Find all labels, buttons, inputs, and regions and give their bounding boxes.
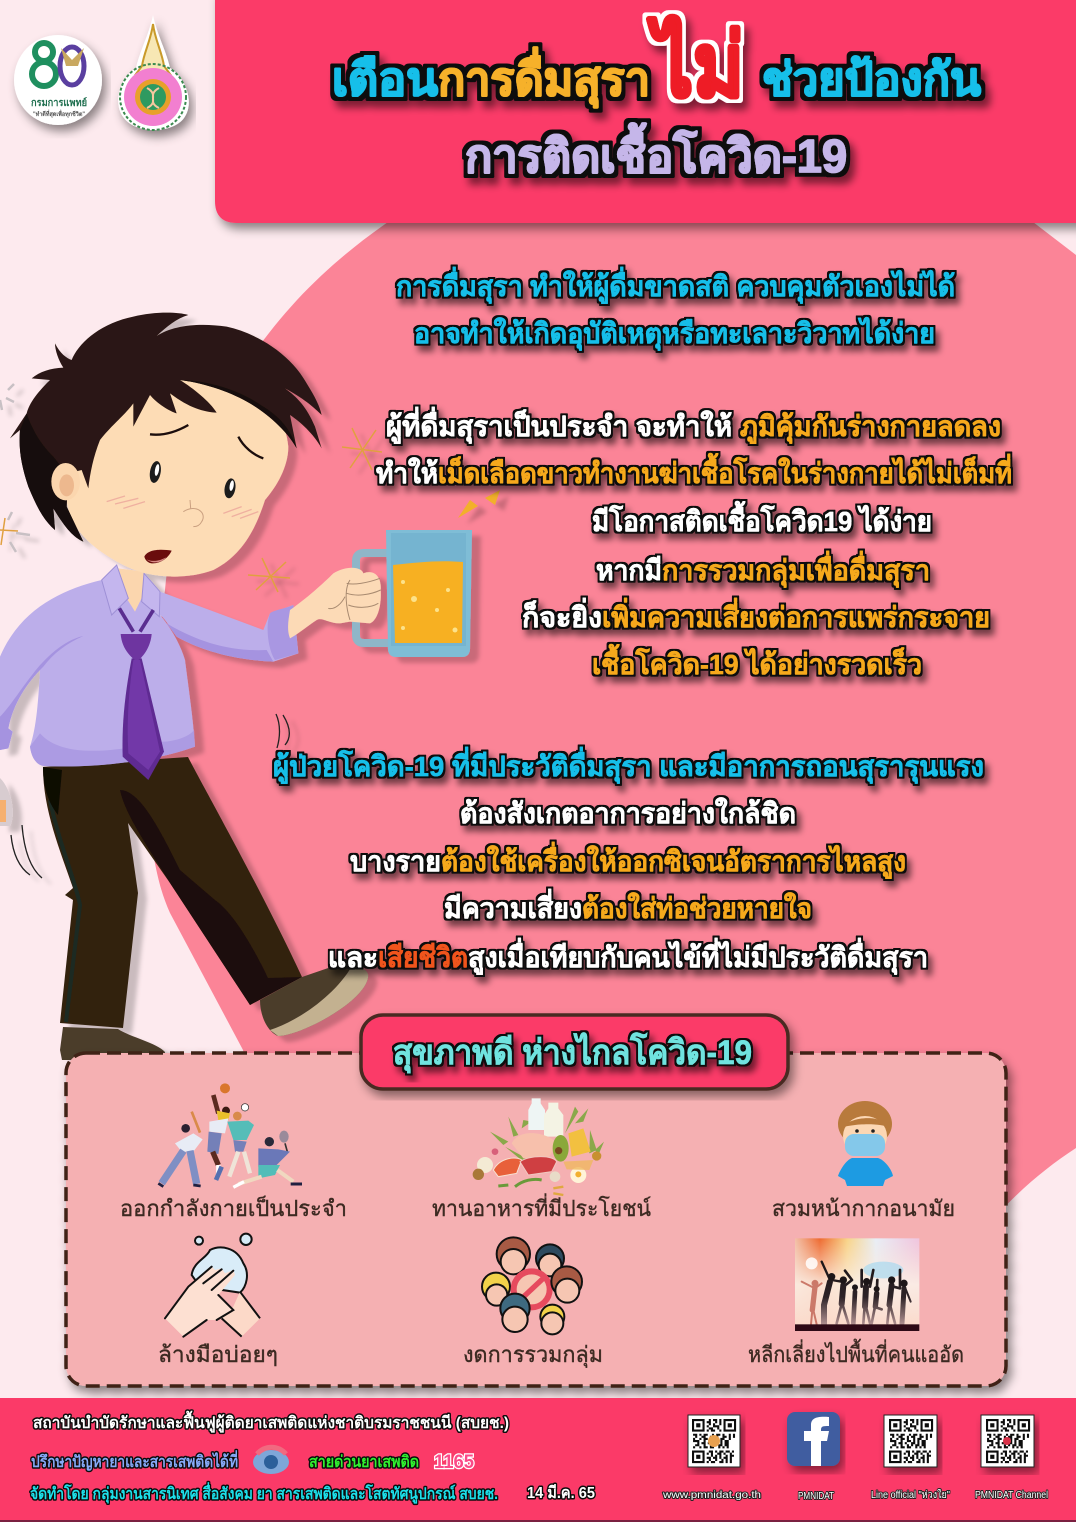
severe line 5: และ <box>328 942 378 973</box>
cuff <box>268 605 298 660</box>
hair <box>10 313 322 542</box>
header banner <box>215 0 1076 223</box>
severe line 3: บางราย <box>350 846 441 877</box>
cheese and mushroom bits <box>477 1157 493 1173</box>
footer: consult line: ปรึกษาปัญหายาและสารเสพติดได้ที่ <box>31 1450 238 1472</box>
title: line 1 part 1: เตือน <box>332 53 439 105</box>
title: line 2: การติดเชื้อโควิด-19 <box>465 122 847 182</box>
footer: hotline label: สายด่วนยาเสพติด <box>309 1453 419 1471</box>
meat <box>520 1157 557 1175</box>
handle <box>356 553 390 643</box>
logo: department of medical services 80 years: "ทำดีที่สุดเพื่อทุกชีวิต" <box>33 109 85 118</box>
salmon <box>493 1158 522 1177</box>
title: line 1 part 2: การดื่มสุรา <box>438 47 650 108</box>
milk bottles <box>528 1098 545 1130</box>
hair <box>838 1101 892 1147</box>
side stripe <box>50 800 80 1022</box>
left arm and torso <box>0 580 195 767</box>
eyes <box>148 460 162 484</box>
text block: immunity <box>376 406 1012 680</box>
beer splash <box>458 490 500 518</box>
ear <box>51 463 80 500</box>
stage <box>795 1324 919 1331</box>
batter <box>158 1112 203 1187</box>
immunity line 1: ผู้ที่ดื่มสุราเป็นประจำ จะทำให้ <box>386 406 732 444</box>
bottom left person <box>500 1294 530 1323</box>
left person <box>482 1273 510 1301</box>
immunity line 2: ทำให้ <box>376 457 438 489</box>
QR code: website <box>688 1415 740 1467</box>
title: emphasised word: ไม่ <box>647 16 744 115</box>
blue glow <box>863 1262 903 1278</box>
QR code: channel <box>981 1415 1034 1467</box>
left shoe <box>60 1027 165 1060</box>
icon: no gathering <box>482 1237 582 1334</box>
front hand edge <box>165 1267 233 1337</box>
immunity line 2 highlight: เม็ดเลือดขาวทำงานฆ่าเชื้อโรคในร่างกายได้ไม่เต็มที่ <box>438 452 1012 489</box>
fringe <box>841 1118 890 1128</box>
intro line 1: การดื่มสุรา ทำให้ผู้ดื่มขาดสติ ควบคุมตัวเองไม่ได้ <box>396 266 955 304</box>
top left person <box>497 1237 530 1271</box>
footer band <box>0 1398 1076 1522</box>
trouser shade <box>120 790 302 1005</box>
severe line 4: มีความเสี่ยง <box>444 888 582 924</box>
grey sparkles <box>0 384 30 552</box>
side shading <box>0 636 83 750</box>
tie blade <box>122 658 164 780</box>
icon: sports people <box>158 1083 302 1187</box>
icon: healthy food <box>473 1098 604 1195</box>
severe line 5 end: สูงเมื่อเทียบกับคนไข้ที่ไม่มีประวัติดื่มสุรา <box>468 937 928 975</box>
icon: child wearing mask <box>838 1101 893 1186</box>
face <box>67 360 288 577</box>
severe line 3 highlight: ต้องใช้เครื่องให้ออกซิเจนอัตราการไหลสูง <box>441 841 906 879</box>
nose <box>183 500 203 527</box>
hip shade <box>43 767 62 815</box>
right person <box>551 1266 582 1297</box>
faded dancer <box>802 1280 822 1324</box>
immunity line 4 highlight: การรวมกลุ่มเพื่อดื่มสุรา <box>662 550 930 588</box>
caption: facebook: PMNIDAT <box>798 1491 834 1502</box>
light backdrop <box>795 1238 919 1331</box>
logo: department of medical services 80 years <box>14 35 102 125</box>
mask <box>845 1134 885 1156</box>
avocado <box>553 1135 569 1162</box>
cheeks and nose <box>107 496 258 518</box>
title <box>332 47 982 182</box>
right shoe <box>260 965 368 1036</box>
icon: facebook <box>787 1412 840 1466</box>
egg orange bits <box>563 1160 593 1170</box>
face <box>843 1116 887 1156</box>
footer: hotline number: 1165 <box>434 1452 474 1473</box>
egg <box>570 1167 586 1183</box>
peas <box>498 1179 542 1187</box>
light spot <box>806 1257 818 1269</box>
title: line 1 part 3: ช่วยป้องกัน <box>762 53 982 105</box>
intro line 2: อาจทำให้เกิดอุบัติเหตุหรือทะเลาะวิวาทได้ง่าย <box>414 317 935 351</box>
tie straps <box>119 608 153 632</box>
immunity line 3: มีโอกาสติดเชื้อโควิด19 ได้ง่าย <box>592 500 932 537</box>
teal player <box>227 1104 254 1177</box>
immunity line 1 highlight: ภูมิคุ้มกันร่างกายลดลง <box>740 411 1001 444</box>
sleeve shade <box>167 623 273 662</box>
icon: telephone <box>253 1447 289 1474</box>
bottom shading <box>30 730 195 767</box>
dancer heads <box>828 1273 908 1292</box>
logo: institute emblem <box>118 15 189 130</box>
label: avoid crowds: หลีกเลี่ยงไปพื้นที่คนแออัด <box>748 1339 964 1367</box>
top right person <box>536 1244 564 1272</box>
immunity line 6: เชื้อโควิด-19 ได้อย่างรวดเร็ว <box>592 643 922 680</box>
jumping player <box>207 1083 230 1180</box>
prohibition sign <box>514 1271 550 1307</box>
bubbles <box>195 1237 203 1245</box>
foam <box>192 1248 247 1293</box>
text block: intro <box>396 266 955 351</box>
trousers <box>43 757 302 1028</box>
back hand <box>222 1292 260 1337</box>
footer: date: 14 มี.ค. 65 <box>527 1483 595 1502</box>
panel heading text: สุขภาพดี ห่างไกลโควิด-19 <box>393 1032 752 1074</box>
body, tie and arm traced at 3x <box>0 565 381 780</box>
icon: crowded party <box>795 1238 919 1331</box>
caption: website: www.pmnidat.go.th <box>662 1490 761 1501</box>
caption: line official: Line official "ห่วงใย" <box>871 1489 950 1501</box>
dancing silhouettes <box>822 1262 911 1324</box>
panel heading pill <box>361 1015 788 1089</box>
label: wash hands: ล้างมือบ่อยๆ <box>158 1342 278 1367</box>
sparkles and motion lines <box>0 428 382 592</box>
severe line 4 highlight: ต้องใส่ท่อช่วยหายใจ <box>582 892 812 924</box>
beer <box>393 561 463 643</box>
severe line 1: ผู้ป่วยโควิด-19 ที่มีประวัติดื่มสุรา และมีอาการถอนสุรารุนแรง <box>273 746 984 784</box>
back hand <box>0 778 13 826</box>
black motion lines <box>11 714 289 878</box>
immunity line 4: หากมี <box>596 555 662 586</box>
tennis player <box>233 1131 302 1187</box>
caption: channel: PMNIDAT Channel <box>975 1490 1048 1501</box>
leaves <box>490 1107 604 1162</box>
brows <box>150 425 263 458</box>
hair shadow <box>20 380 297 542</box>
label: no gathering: งดการรวมกลุ่ม <box>463 1342 603 1368</box>
footer: organisation name: สถาบันบำบัดรักษาและฟื้นฟูผู้ติดยาเสพติดแห่งชาติบรมราชชนนี (สบยช.) <box>33 1410 509 1434</box>
neck <box>118 568 144 612</box>
right shoe sole <box>270 966 368 1036</box>
finger lines <box>328 578 381 620</box>
sleeve <box>160 592 298 662</box>
label: food: ทานอาหารที่มีประโยชน์ <box>432 1193 651 1221</box>
logo: department of medical services 80 years: กรมการแพทย์ <box>31 97 87 109</box>
glass body <box>391 533 466 646</box>
lower glow <box>795 1238 919 1331</box>
head traced at 3x <box>10 313 322 577</box>
cheese <box>568 1128 591 1157</box>
mouth <box>144 550 172 563</box>
severe line 2: ต้องสังเกตอาการอย่างใกล้ชิด <box>460 797 796 829</box>
footer: producer line: จัดทำโดย กลุ่มงานสารนิเทศ สื่อสังคม ยา สารเสพติดและโสตทัศนูปกรณ์ สบยช. <box>30 1482 498 1505</box>
chicken <box>512 1133 557 1158</box>
panel: healthy tips <box>66 1053 1006 1386</box>
QR code: line official <box>884 1415 937 1467</box>
inner ear <box>59 474 74 496</box>
back hand edge <box>222 1292 260 1337</box>
grains <box>553 1187 563 1195</box>
immunity line 5: ก็จะยิ่ง <box>522 597 602 633</box>
tie knot <box>121 634 152 660</box>
back fingers <box>0 800 6 822</box>
label: mask: สวมหน้ากากอนามัย <box>772 1196 955 1221</box>
lower lip <box>147 557 166 562</box>
tie highlight <box>128 660 160 770</box>
label: exercise: ออกกำลังกายเป็นประจำ <box>120 1194 347 1221</box>
front hand <box>165 1267 235 1337</box>
hand <box>288 568 381 638</box>
icon: hand washing <box>165 1234 260 1337</box>
beer mug <box>356 530 472 657</box>
shirt <box>838 1158 893 1186</box>
character: drunk man with beer <box>0 313 500 1060</box>
eyes <box>855 1129 859 1133</box>
bottom right person <box>540 1305 564 1329</box>
collar <box>102 565 160 617</box>
text block: severe cases <box>273 746 984 975</box>
glass <box>386 530 472 657</box>
severe line 5 highlight: เสียชีวิต <box>378 942 468 973</box>
pink background blob <box>149 222 1076 1212</box>
immunity line 5 highlight: เพิ่มความเสี่ยงต่อการแพร่กระจาย <box>602 597 990 633</box>
